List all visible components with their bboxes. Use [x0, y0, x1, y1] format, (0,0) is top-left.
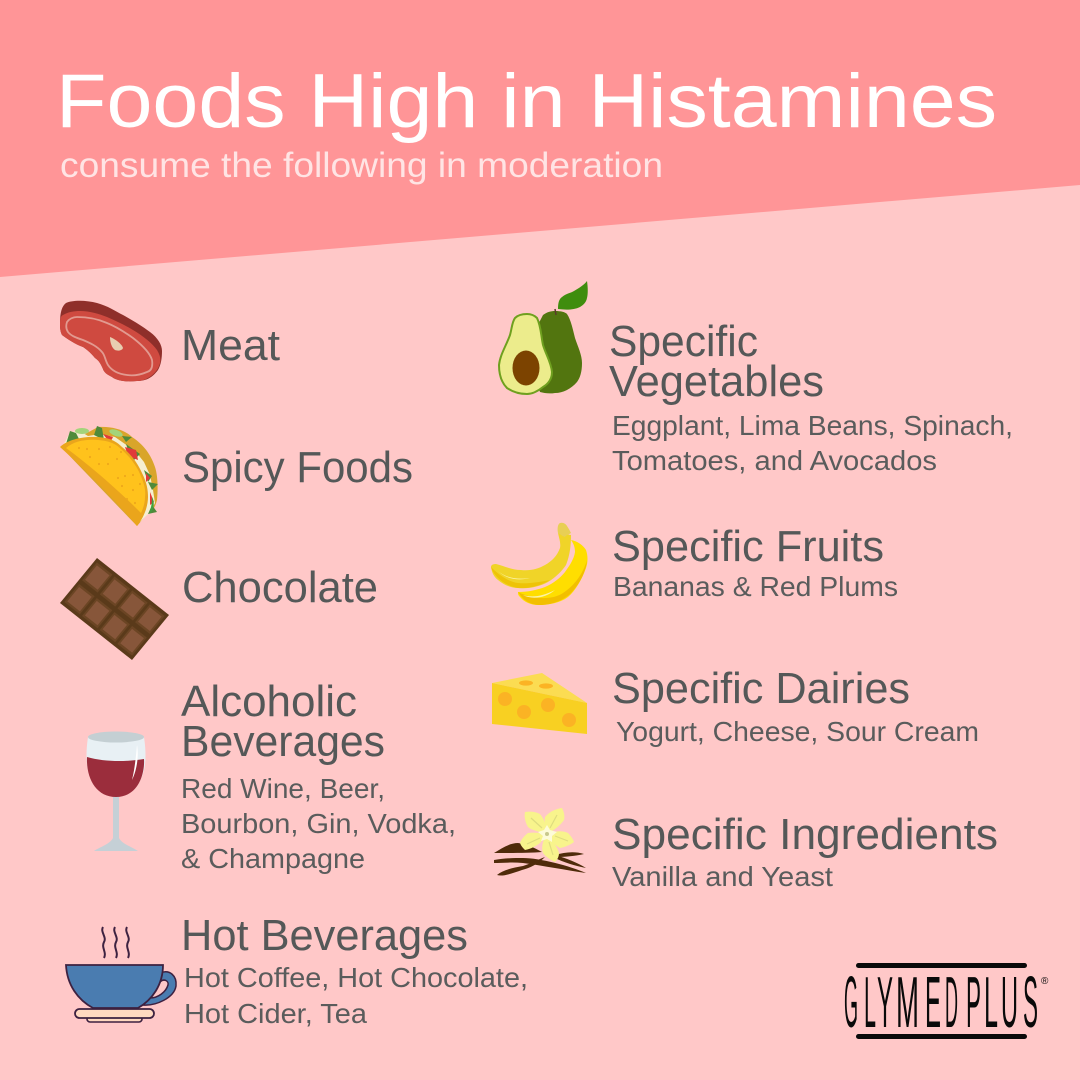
heading: Specific Ingredients: Specific Ingredients [612, 810, 998, 859]
icon: wine glass [86, 732, 146, 851]
logo: GlyMed Plus: ® [1041, 976, 1049, 987]
logo: GlyMed Plus: L [984, 963, 998, 1043]
icon: taco [60, 426, 158, 526]
logo: GlyMed Plus: S [1023, 963, 1038, 1043]
heading: Alcoholic Beverages: Beverages [181, 717, 385, 766]
icon: meat [60, 301, 162, 381]
icon: bananas [491, 523, 588, 605]
icon: vanilla flower [494, 808, 586, 876]
logo: GlyMed Plus: Y [877, 963, 893, 1043]
text: hot beverages list [184, 962, 528, 1029]
logo: GlyMed Plus [844, 963, 1049, 1043]
heading: Specific Fruits: Specific Fruits [612, 522, 884, 571]
logo: GlyMed Plus: D [945, 963, 958, 1043]
logo: GlyMed Plus: L [864, 963, 876, 1043]
header band [0, 0, 1080, 277]
icon: cheese [492, 673, 587, 734]
text: hot beverages list: Hot Cider, Tea [184, 998, 367, 1029]
logo: GlyMed Plus: P [966, 963, 981, 1043]
logo: GlyMed Plus: M [896, 963, 919, 1043]
text: fruits list: Bananas & Red Plums [613, 571, 898, 602]
heading: Alcoholic Beverages [181, 677, 385, 766]
icon: chocolate bar [60, 558, 169, 660]
text: dairies list: Yogurt, Cheese, Sour Cream [616, 716, 979, 747]
title: Foods High in Histamines [56, 59, 997, 144]
heading: Spicy Foods: Spicy Foods [182, 443, 413, 492]
text: alcoholic list: Red Wine, Beer, [181, 773, 385, 804]
subtitle: consume the following in moderation [60, 146, 663, 185]
heading: Specific Vegetables [609, 317, 824, 406]
icon: avocado [499, 281, 588, 394]
logo: GlyMed Plus: G [844, 963, 858, 1043]
text: hot beverages list: Hot Coffee, Hot Chocolate, [184, 962, 528, 993]
heading: Hot Beverages: Hot Beverages [181, 911, 468, 960]
text: vegetable list: Tomatoes, and Avocados [612, 445, 937, 476]
text: vegetable list [612, 410, 1013, 476]
heading: Specific Dairies: Specific Dairies [612, 664, 910, 713]
heading: Meat: Meat [181, 321, 280, 370]
heading: Specific Vegetables: Specific [609, 317, 758, 366]
text: alcoholic list: Bourbon, Gin, Vodka, [181, 808, 456, 839]
text: vegetable list: Eggplant, Lima Beans, Spinach, [612, 410, 1013, 441]
text: ingredients list: Vanilla and Yeast [612, 861, 833, 892]
text: alcoholic list [181, 773, 456, 874]
logo: GlyMed Plus: E [925, 963, 941, 1043]
text: alcoholic list: & Champagne [181, 843, 365, 874]
heading: Specific Vegetables: Vegetables [609, 357, 824, 406]
icon: tea cup [66, 927, 176, 1022]
logo: GlyMed Plus: U [1001, 963, 1018, 1043]
heading: Alcoholic Beverages: Alcoholic [181, 677, 357, 726]
heading: Chocolate: Chocolate [182, 563, 378, 612]
